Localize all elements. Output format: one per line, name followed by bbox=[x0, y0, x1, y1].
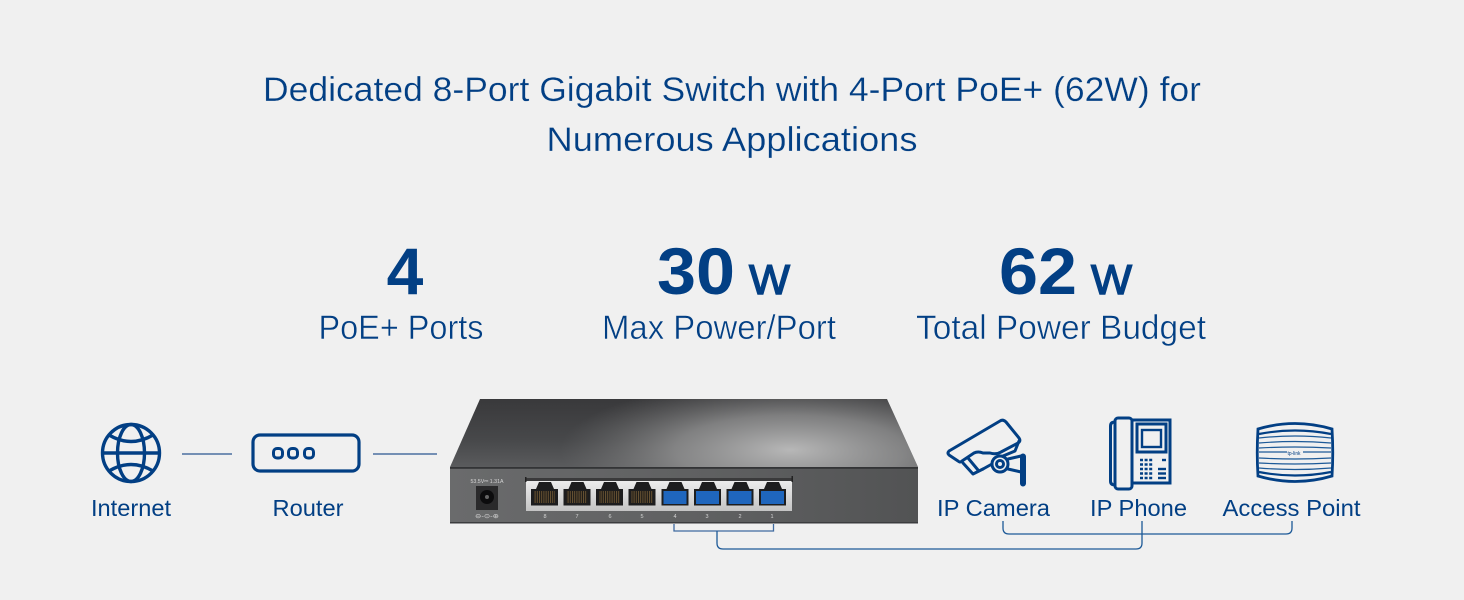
label: IP phone: IP Phone bbox=[1090, 495, 1187, 521]
stat: 62 W total power budget: Total Power Budget bbox=[916, 309, 1207, 347]
power socket bbox=[470, 479, 504, 520]
icon: access point bbox=[1257, 424, 1333, 482]
port numbers: 5 bbox=[640, 514, 644, 520]
blue PoE+ ports 4 to 1 bbox=[662, 482, 786, 506]
power socket: ⊖-⊙-⊕ bbox=[475, 514, 499, 520]
label: internet: Internet bbox=[91, 495, 172, 521]
icon: IP camera bbox=[948, 420, 1024, 485]
bracket: PoE+ ports bbox=[674, 524, 774, 531]
icon: globe bbox=[102, 424, 160, 482]
switch front face bbox=[450, 467, 918, 524]
stat: 62 W total power budget: W bbox=[1091, 256, 1132, 303]
port numbers: 4 bbox=[673, 514, 677, 520]
stat: 4 PoE+ ports: 4 bbox=[387, 234, 424, 308]
stat: 30 W max power per port: W bbox=[749, 256, 790, 303]
label: access point: Access Point bbox=[1222, 495, 1361, 521]
stat: 30 W max power per port: Max Power/Port bbox=[602, 309, 837, 347]
switch bbox=[450, 399, 918, 524]
grey ports 8 to 5 bbox=[531, 482, 656, 506]
port numbers: 7 bbox=[575, 514, 579, 520]
port panel bbox=[525, 476, 793, 511]
port numbers: 6 bbox=[608, 514, 612, 520]
power socket: 53.5V⎓ 1.31A bbox=[470, 479, 504, 485]
port numbers: 3 bbox=[705, 514, 709, 520]
title: Numerous Applications bbox=[546, 121, 918, 159]
port numbers: 2 bbox=[738, 514, 742, 520]
connector: router to switch bbox=[373, 453, 437, 455]
label: IP camera: IP Camera bbox=[937, 495, 1050, 521]
title: Dedicated 8-Port Gigabit Switch with 4-Port PoE+ (62W) for bbox=[263, 71, 1201, 109]
icon: router bbox=[253, 435, 359, 471]
switch top face bbox=[450, 399, 918, 467]
icon: IP phone bbox=[1110, 418, 1170, 489]
stat: 30 W max power per port bbox=[602, 234, 837, 347]
stat: 4 PoE+ ports: PoE+ Ports bbox=[318, 309, 484, 347]
port numbers: 1 bbox=[770, 514, 774, 520]
label: router: Router bbox=[272, 495, 344, 521]
stat: 30 W max power per port: 30 bbox=[657, 234, 735, 308]
stat: 62 W total power budget bbox=[916, 234, 1207, 347]
title bbox=[263, 71, 1201, 159]
stat: 4 PoE+ ports bbox=[318, 234, 484, 347]
port numbers bbox=[543, 514, 774, 520]
bracket: devices bbox=[1003, 521, 1292, 534]
stat: 62 W total power budget: 62 bbox=[999, 234, 1077, 308]
port numbers: 8 bbox=[543, 514, 547, 520]
connector: PoE+ ports to devices bbox=[717, 521, 1142, 549]
connector: internet to router bbox=[182, 453, 232, 455]
access point logo: tp-link bbox=[1288, 451, 1301, 457]
